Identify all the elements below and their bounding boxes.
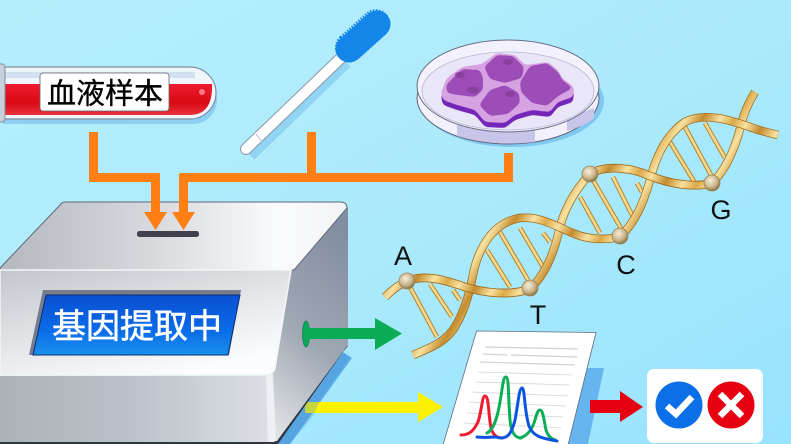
- red arrow: report to result: [590, 391, 643, 422]
- nucleotide label C: C: [616, 250, 636, 280]
- orange arrow: blood sample to slot: [89, 132, 167, 230]
- helix nodes: [399, 166, 720, 296]
- strand two: [413, 117, 778, 355]
- extraction machine: [0, 202, 443, 444]
- green arrow: machine to DNA: [302, 318, 402, 350]
- nucleotide label T: T: [530, 300, 546, 330]
- nucleotide label A: A: [394, 241, 412, 271]
- swab: [246, 5, 395, 156]
- DNA double helix: [385, 92, 778, 355]
- tube label: 血液样本: [47, 78, 163, 110]
- base pair rungs: [410, 123, 725, 337]
- result card: [647, 369, 763, 443]
- insertion slot: [137, 231, 199, 237]
- yellow arrow: machine to report: [305, 392, 443, 422]
- nucleotide label G: G: [710, 195, 732, 225]
- strand one: [385, 92, 755, 297]
- display screen: [29, 290, 241, 355]
- display screen: 基因提取中: [52, 308, 222, 346]
- petri dish with tissue: [417, 40, 604, 147]
- negative result icon: [708, 382, 754, 428]
- sequencing report: [443, 331, 604, 444]
- strand one front segments: [407, 168, 712, 293]
- chromatogram peaks: [461, 377, 557, 441]
- tissue sample: [441, 53, 574, 128]
- orange arrow: swab and tissue to slot: [172, 132, 513, 230]
- positive result icon: [656, 382, 702, 428]
- test tube: blood sample: [0, 64, 217, 124]
